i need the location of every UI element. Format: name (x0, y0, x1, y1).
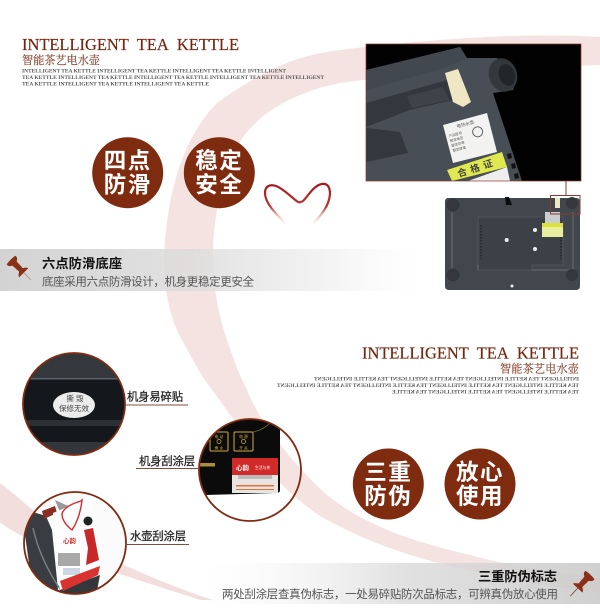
icon: heart outline (265, 184, 330, 225)
panel: zoomed photo of kettle base: 合格证 (456, 156, 498, 180)
bar: six-point anti-slip base (0, 249, 420, 291)
panel: kettle base full view (445, 197, 580, 290)
title: lower heading (362, 344, 579, 376)
text block: decorative small text (22, 70, 325, 88)
labels (545, 212, 560, 223)
label: body scratch coating: 机身刮涂层 (139, 454, 195, 468)
label: kettle scratch coating (125, 529, 189, 544)
label: fragile sticker (125, 390, 188, 405)
photo circle: fragile sticker (23, 353, 125, 455)
peg (555, 198, 560, 208)
bar: six-point anti-slip base: 底座采用六点防滑设计，机身更稳定更安全 (42, 274, 254, 288)
badge: stable and safe: 稳定 (195, 148, 243, 174)
base holes (505, 238, 509, 242)
badge: use with confidence: 放心 (456, 460, 504, 485)
text block: mirrored decorative text (276, 378, 579, 396)
text block: decorative small text: TEA KETTLE INTELLIGENT TEA KETTLE INTELLIGENT TEA KETTLE (22, 82, 209, 88)
photo circle: body scratch coating: 开 关 (239, 446, 248, 450)
photo circle: body scratch coating: 煮 水 (215, 446, 224, 450)
text block: mirrored decorative text: TEA KETTLE INTELLIGENT TEA KETTLE INTELLIGENT TEA KETTLE INTELLIGENT TEA KETTLE INTELLIGENT (276, 384, 579, 389)
text block: mirrored decorative text: INTELLIGENT TEA KETTLE INTELLIGENT TEA KETTLE INTELLIGENT TEA KETTLE INTELLIGENT (313, 378, 579, 382)
text block: decorative small text: TEA KETTLE INTELLIGENT TEA KETTLE INTELLIGENT TEA KETTLE INTELLIGENT TEA KETTLE INTELLIGENT (22, 76, 325, 81)
badge: use with confidence (444, 448, 516, 520)
photo circle: body scratch coating: 电 动 (215, 434, 224, 439)
cream peg (445, 69, 471, 107)
panel: zoomed photo of kettle base: 产品型号 (448, 130, 463, 138)
label: fragile sticker: 机身易碎贴 (127, 390, 183, 404)
subtitle: Chinese product name: 智能茶艺电水壶 (22, 52, 100, 68)
icon: push pin (565, 570, 595, 601)
panel: zoomed photo of kettle base: 额定电压 (449, 135, 464, 143)
text block: decorative small text: INTELLIGENT TEA KETTLE INTELLIGENT TEA KETTLE INTELLIGENT TEA KETTLE INTELLIGENT (22, 70, 287, 74)
base corner body (366, 47, 522, 181)
callout: connector box and line (550, 181, 580, 214)
icon: push pin (6, 255, 35, 284)
photo circle: kettle scratch coating: 心韵 (63, 536, 76, 545)
photo circle: body scratch coating: 电 源 (239, 434, 248, 439)
photo circle: body scratch coating: 心韵 (236, 463, 250, 472)
subtitle: Chinese product name: 智能茶艺电水壶 (500, 360, 579, 376)
title: lower heading: INTELLIGENT TEA KETTLE (362, 344, 579, 362)
panel: zoomed photo of kettle base: 额定容量 (452, 144, 467, 153)
badge: triple anti-counterfeit (353, 448, 424, 520)
title: top heading: INTELLIGENT TEA KETTLE (22, 35, 239, 54)
bar: triple anti-counterfeit marks (205, 563, 600, 604)
panel: zoomed photo of kettle base: 电热水壶 (456, 118, 475, 130)
text block: mirrored decorative text: TEA KETTLE INTELLIGENT TEA KETTLE INTELLIGENT TEA KETTLE (392, 390, 579, 396)
photo circle: fragile sticker: 保修无效 (59, 403, 89, 413)
rubber feet (446, 198, 460, 212)
photo frame (366, 44, 581, 181)
photo circle: fragile sticker: 撕 毁 (66, 393, 84, 403)
photo circle: body scratch coating: 生活与茶 (255, 465, 270, 470)
badge: four-point anti-slip: 四点 (104, 148, 152, 174)
photo circle: body scratch coating (195, 415, 301, 521)
badge: triple anti-counterfeit: 三重 (364, 460, 412, 485)
label: kettle scratch coating: 水壶刮涂层 (130, 529, 186, 543)
bar: six-point anti-slip base: 六点防滑底座 (42, 255, 122, 271)
white rating label (443, 113, 497, 163)
badge: stable and safe (184, 137, 255, 208)
panel: zoomed photo of kettle base (366, 44, 581, 181)
bar: triple anti-counterfeit marks: 两处刮涂层查真伪标志，一处易碎贴防次品标志，可辨真伪放心使用 (222, 587, 558, 601)
rubber foot (488, 58, 518, 92)
panel: zoomed photo of kettle base: 额定功率 (451, 140, 466, 148)
vent slots (507, 153, 519, 179)
badge: stable and safe: 安全 (195, 172, 243, 198)
title: top heading (22, 35, 239, 68)
badge: use with confidence: 使用 (456, 484, 504, 509)
photo circle: kettle scratch coating (24, 492, 126, 596)
badge: four-point anti-slip (92, 137, 163, 208)
badge: four-point anti-slip: 防滑 (104, 172, 152, 198)
hang tag (53, 506, 78, 590)
top latch (505, 197, 512, 205)
yellow certificate label (447, 152, 507, 181)
bar: triple anti-counterfeit marks: 三重防伪标志 (478, 568, 557, 584)
badge: triple anti-counterfeit: 防伪 (364, 484, 412, 509)
